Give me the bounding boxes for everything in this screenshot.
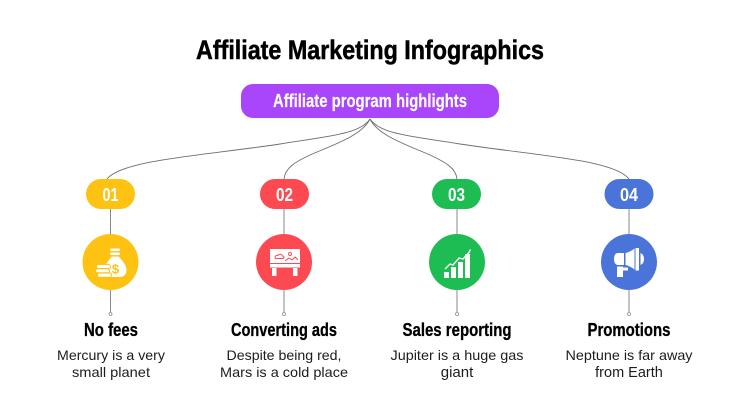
end dot 3	[456, 312, 458, 316]
column 2: Converting ads	[220, 179, 348, 380]
body text 1: Mercury is a very	[57, 347, 165, 363]
end dot 2	[282, 312, 286, 316]
stem 1	[110, 209, 112, 312]
header pill: Affiliate program highlights: Affiliate program highlights	[273, 91, 467, 111]
connector lines	[107, 119, 629, 179]
stem 4	[628, 209, 630, 312]
icon: money bag and coins: $	[112, 262, 120, 276]
heading: No fees: No fees	[84, 320, 138, 340]
body text 4	[566, 347, 692, 381]
number badge 03	[432, 179, 481, 209]
number badge 01	[86, 179, 135, 209]
end dot 4	[628, 312, 630, 316]
body text 2: Despite being red,	[226, 347, 342, 363]
number badge 02	[260, 179, 309, 209]
stem 2	[283, 209, 285, 312]
body text 3	[390, 347, 524, 381]
end dot 1	[109, 312, 112, 316]
body text 4: Neptune is far away	[566, 347, 692, 363]
body text 3: Jupiter is a huge gas	[390, 347, 524, 363]
number badge 02: 02	[276, 185, 293, 205]
stem 3	[456, 209, 458, 312]
column 1: No fees	[57, 179, 165, 380]
title: Affiliate Marketing Infographics	[196, 35, 544, 65]
number badge 03: 03	[448, 185, 465, 205]
heading: Sales reporting: Sales reporting	[402, 320, 512, 340]
number badge 04: 04	[620, 185, 638, 205]
icon: money bag and coins	[82, 234, 138, 290]
number badge 04	[604, 179, 654, 209]
body text 2	[220, 347, 348, 380]
number badge 01: 01	[102, 185, 118, 205]
heading: Promotions: Promotions	[588, 320, 670, 340]
body text 3: giant	[441, 364, 474, 381]
column 4: Promotions	[566, 179, 692, 381]
body text 1	[57, 347, 165, 380]
icon: megaphone	[601, 234, 657, 290]
body text 2: Mars is a cold place	[220, 364, 348, 380]
body text 4: from Earth	[595, 365, 663, 381]
column 3: Sales reporting	[390, 179, 524, 381]
body text 1: small planet	[72, 364, 150, 380]
icon: presentation board	[256, 234, 312, 290]
icon: growth bar chart	[429, 234, 485, 290]
heading: Converting ads: Converting ads	[231, 320, 337, 340]
header pill: Affiliate program highlights	[241, 84, 499, 118]
